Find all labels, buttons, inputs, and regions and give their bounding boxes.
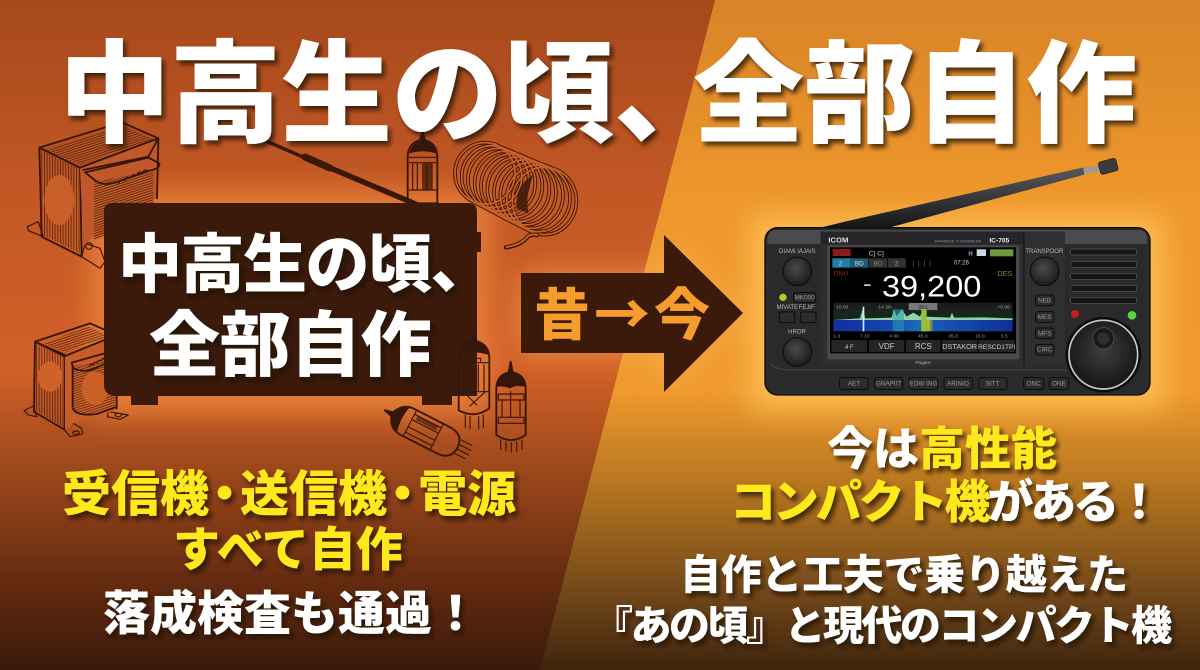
brand: JAPANESE YI ENGINEER	[934, 239, 981, 244]
caption line 1: 今は高性能	[827, 423, 1057, 475]
screen: VDF	[879, 342, 895, 351]
speaker grille	[1071, 249, 1137, 303]
caption line 2: すべて自作	[173, 523, 403, 576]
brand: IC-705	[989, 238, 1010, 245]
screen: 2	[839, 260, 843, 267]
box text: line 1: 中高生の頃、	[118, 214, 493, 306]
bottom buttons: ARINIO	[947, 380, 969, 387]
caption line 3: 自作と工夫で乗り越えた	[680, 552, 1128, 598]
brand	[828, 236, 1010, 245]
main tuning dial	[1066, 317, 1141, 392]
icon: IC-705 style transceiver	[765, 158, 1150, 395]
screen: ONU	[833, 270, 848, 277]
caption line 4: 『あの頃』と現代のコンパクト機	[592, 603, 1172, 649]
top bezel highlight	[767, 230, 1147, 244]
screen: 45.0	[918, 333, 928, 339]
left controls: MIVATE	[777, 305, 798, 311]
screen: 10.00	[836, 304, 849, 310]
screen: Flugen	[915, 360, 931, 366]
left controls	[777, 249, 816, 366]
screen: DSTAKOR	[942, 342, 977, 351]
screen: 35.0	[948, 333, 958, 339]
screen: RESCD1TPI	[978, 344, 1015, 351]
right controls: CIRC	[1037, 347, 1053, 354]
arrow: past to present	[521, 235, 743, 392]
right controls: TRANSPOOR	[1025, 249, 1064, 255]
panel: radio-shaped title box	[104, 203, 493, 405]
screen: H	[968, 251, 973, 257]
radio body	[765, 228, 1150, 395]
screen: 39,200	[882, 271, 981, 304]
background: past orange-brown panel	[0, 0, 715, 670]
bottom buttons: GNAPIIT	[876, 380, 901, 387]
icon: large transformer	[27, 122, 159, 268]
screen: 1.0	[833, 333, 840, 339]
screen: +0.06	[997, 304, 1010, 310]
right controls	[1025, 249, 1064, 355]
screen: 2	[895, 260, 899, 267]
screen: 10.0	[975, 333, 985, 339]
background: present amber panel	[540, 0, 1200, 670]
left controls: FEJIF	[799, 305, 815, 311]
tube: tall left	[459, 332, 489, 429]
screen: 4.00	[889, 333, 899, 339]
right controls: MES	[1038, 314, 1052, 321]
left controls: MK000	[795, 295, 815, 302]
caption line 1: 受信機・送信機・電源	[62, 468, 516, 522]
bottom buttons: SITT	[986, 380, 1000, 387]
right controls: MFS	[1038, 330, 1051, 337]
bottom buttons: AET	[848, 381, 860, 388]
brand: ICOM	[828, 236, 848, 245]
bottom buttons: ONE	[1052, 380, 1066, 387]
icon: vacuum tube top	[408, 132, 437, 203]
screen: DES	[997, 269, 1013, 278]
screen: RCS	[915, 342, 932, 351]
left caption: everything homemade	[62, 468, 516, 640]
inner panel	[821, 232, 1065, 367]
screen: 3.5	[1001, 333, 1008, 339]
icon: copper coil	[455, 143, 576, 247]
glow around transceiver	[750, 215, 1165, 410]
icon: small transformer	[24, 323, 128, 437]
screen: BD	[874, 260, 883, 267]
right controls: NEB	[1038, 297, 1051, 304]
screen	[827, 245, 1019, 366]
screen: 20.1	[918, 305, 928, 311]
main title: part 1: 中高生の頃、	[59, 4, 725, 165]
icon: vacuum tubes lower group	[378, 332, 526, 467]
bottom buttons: EOW ING	[909, 380, 937, 387]
arrow label: 昔→今	[534, 271, 714, 352]
right caption: compact rigs today	[592, 423, 1172, 649]
tube: short right	[496, 362, 526, 452]
main title: part 2: 全部自作	[693, 4, 1137, 165]
icon: radio antenna	[266, 141, 425, 208]
left controls: HROR	[788, 330, 806, 336]
box text: line 2: 全部自作	[149, 289, 431, 391]
whip antenna	[822, 158, 1119, 227]
screen: 07:26	[954, 261, 970, 267]
glow around radio box	[90, 190, 490, 415]
indicator LEDs	[1071, 310, 1136, 320]
screen: 7.10	[860, 333, 870, 339]
glow around arrow	[521, 235, 743, 392]
tube: lying down	[378, 397, 476, 467]
bottom buttons: ONC	[1027, 380, 1041, 387]
caption line 3: 落成検査も通過！	[103, 587, 479, 640]
screen: BD	[855, 260, 864, 267]
bottom buttons	[840, 378, 1069, 389]
screen: -14 28-	[877, 304, 893, 310]
screen: C] C]	[869, 250, 884, 257]
screen: 4 F	[845, 345, 854, 351]
caption line 2: コンパクト機がある！	[730, 476, 1162, 528]
screen: | | | |	[912, 261, 931, 267]
left controls: DIAMI IAJAIS	[779, 249, 816, 255]
